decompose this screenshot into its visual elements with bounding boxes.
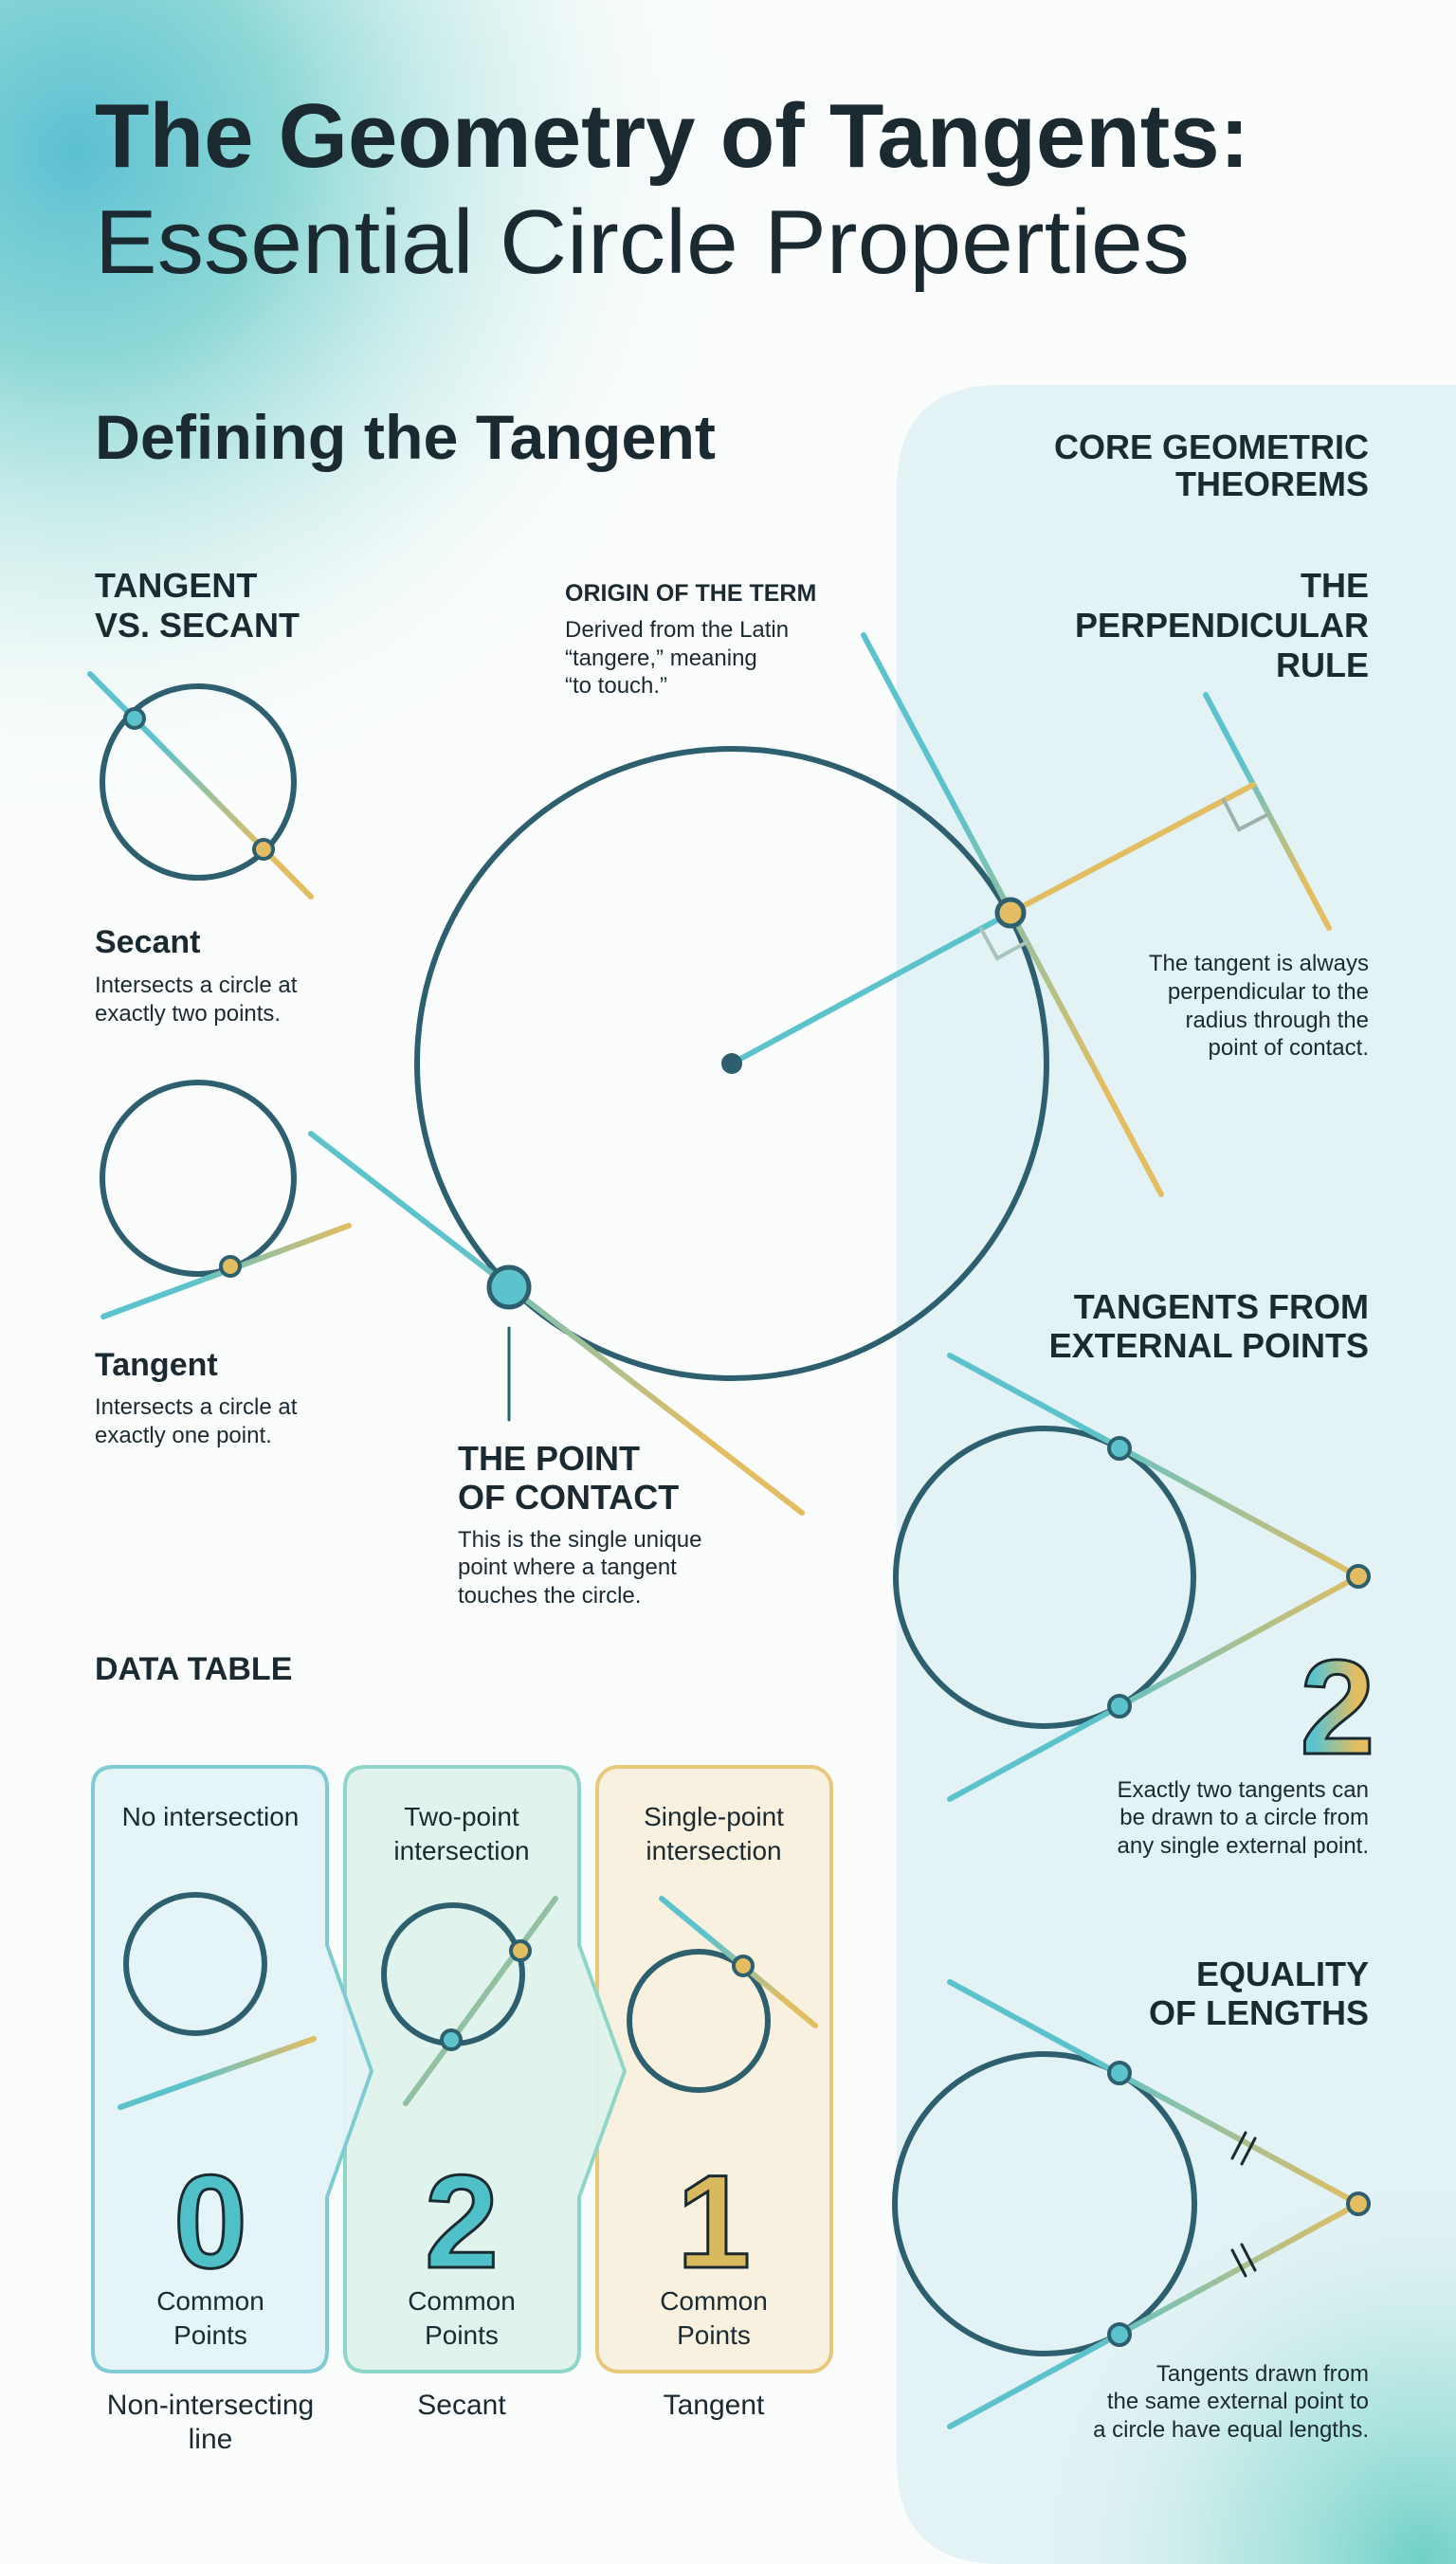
card: no intersection: Common: [156, 2286, 264, 2316]
heading: equality of lengths: [1149, 1955, 1369, 2032]
card labels: Tangent: [664, 2390, 765, 2421]
heading: perpendicular rule: RULE: [1276, 646, 1369, 684]
text: perpendicular rule body: perpendicular to the: [1168, 979, 1369, 1005]
text: equality body: a circle have equal lengths.: [1093, 2417, 1369, 2443]
panel: core geometric theorems: [897, 385, 1456, 2564]
text: origin of the term: [565, 580, 816, 699]
diagram: external tangents: [896, 1355, 1369, 1799]
text: point of contact: [458, 1439, 701, 1609]
text: equality body: [1093, 2361, 1369, 2443]
heading: perpendicular rule: THE: [1301, 566, 1369, 605]
title: [95, 85, 1249, 293]
text: equality body: Tangents drawn from: [1156, 2361, 1369, 2387]
heading: core geometric theorems: [1054, 427, 1369, 503]
card: tangent: Points: [677, 2320, 751, 2350]
diagram: perpendicular rule: [1010, 695, 1329, 928]
card: no intersection: No intersection: [122, 1802, 299, 1831]
text: equality body: the same external point to: [1107, 2389, 1369, 2414]
card: secant: [345, 1767, 625, 2372]
heading: equality of lengths: EQUALITY: [1196, 1955, 1369, 1993]
card labels: Secant: [417, 2390, 506, 2421]
diagram: equal tangents: [895, 1982, 1369, 2427]
heading: tangents from external points: TANGENTS FROM: [1074, 1287, 1369, 1326]
diagram: main circle with tangent: [311, 635, 1161, 1513]
card: tangent: 1: [677, 2147, 751, 2296]
heading: defining the tangent: Defining the Tangent: [95, 402, 716, 472]
heading: core geometric theorems: THEOREMS: [1175, 464, 1369, 503]
heading: tangent vs secant: [95, 566, 300, 645]
text: point of contact: OF CONTACT: [458, 1478, 679, 1517]
heading: tangents from external points: EXTERNAL POINTS: [1049, 1326, 1369, 1365]
text: point of contact: THE POINT: [458, 1439, 640, 1478]
text: external tangents body: be drawn to a circle from: [1119, 1805, 1369, 1830]
big number 2: 2: [1301, 1632, 1374, 1783]
card labels: [107, 2390, 765, 2455]
card labels: line: [189, 2424, 232, 2455]
text: origin of the term: Derived from the Latin: [565, 617, 789, 643]
text: secant: Secant: [95, 924, 201, 960]
text: tangent: Intersects a circle at: [95, 1394, 298, 1420]
text: origin of the term: “tangere,” meaning: [565, 646, 757, 671]
card: tangent: Common: [660, 2286, 768, 2316]
text: external tangents body: any single external point.: [1117, 1833, 1369, 1859]
card: secant: Common: [408, 2286, 516, 2316]
text: secant: exactly two points.: [95, 1001, 281, 1027]
heading: data table: DATA TABLE: [95, 1651, 292, 1687]
title: The Geometry of Tangents:: [95, 85, 1249, 187]
heading: tangent vs secant: VS. SECANT: [95, 606, 300, 645]
card: tangent: [597, 1767, 831, 2372]
text: external tangents body: Exactly two tangents can: [1118, 1777, 1369, 1803]
text: tangent: Tangent: [95, 1347, 218, 1383]
card: secant: Points: [425, 2320, 499, 2350]
text: origin of the term: “to touch.”: [565, 673, 667, 699]
text: point of contact: point where a tangent: [458, 1555, 677, 1580]
text: tangent: [95, 1347, 298, 1448]
heading: equality of lengths: OF LENGTHS: [1149, 1993, 1369, 2032]
card: no intersection: [93, 1767, 372, 2372]
text: perpendicular rule body: [1149, 951, 1369, 1061]
heading: perpendicular rule: [1075, 566, 1369, 684]
text: perpendicular rule body: radius through the: [1186, 1008, 1369, 1033]
heading: perpendicular rule: PERPENDICULAR: [1075, 606, 1369, 645]
diagram: tangent: [102, 1082, 349, 1317]
text: secant: [95, 924, 298, 1027]
card: tangent: intersection: [646, 1836, 782, 1865]
text: external tangents body: [1117, 1777, 1369, 1859]
card: secant: 2: [425, 2147, 499, 2296]
heading: tangent vs secant: TANGENT: [95, 566, 257, 605]
card: secant: Two-point: [404, 1802, 519, 1831]
heading: tangents from external points: [1049, 1287, 1369, 1365]
text: secant: Intersects a circle at: [95, 973, 298, 998]
text: perpendicular rule body: The tangent is always: [1149, 951, 1369, 976]
text: point of contact: This is the single unique: [458, 1527, 701, 1553]
text: tangent: exactly one point.: [95, 1423, 272, 1448]
text: origin of the term: ORIGIN OF THE TERM: [565, 580, 816, 607]
text: perpendicular rule body: point of contact.: [1209, 1035, 1369, 1061]
card: no intersection: Points: [173, 2320, 247, 2350]
diagram: secant: [90, 674, 311, 897]
card: secant: intersection: [393, 1836, 530, 1865]
title: Essential Circle Properties: [95, 191, 1190, 293]
card labels: Non-intersecting: [107, 2390, 314, 2421]
card: tangent: Single-point: [644, 1802, 784, 1831]
text: point of contact: touches the circle.: [458, 1583, 641, 1609]
heading: core geometric theorems: CORE GEOMETRIC: [1054, 427, 1369, 466]
card: no intersection: 0: [173, 2147, 247, 2296]
